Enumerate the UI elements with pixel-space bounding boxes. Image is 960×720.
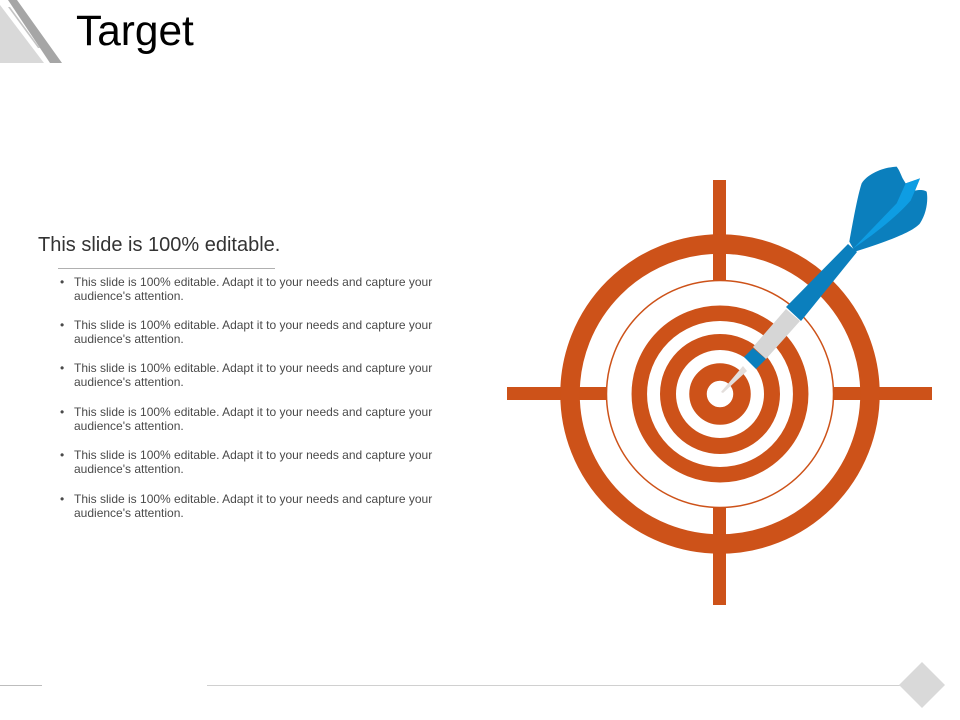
bullet 6: • xyxy=(60,492,64,506)
bullet 1: This slide is 100% editable. Adapt it to your needs and capture your xyxy=(74,275,432,289)
footer diamond xyxy=(899,662,945,708)
bullet 1: audience's attention. xyxy=(74,289,184,303)
bullet 4: This slide is 100% editable. Adapt it to your needs and capture your xyxy=(74,405,432,419)
bullet 2: This slide is 100% editable. Adapt it to your needs and capture your xyxy=(74,318,432,332)
target xyxy=(507,180,932,605)
dart barrel xyxy=(753,309,800,359)
bullet 4: audience's attention. xyxy=(74,419,184,433)
bullet 1: • xyxy=(60,275,64,289)
bullet 3: audience's attention. xyxy=(74,375,184,389)
dart tip collar xyxy=(744,348,766,369)
bullet 5 xyxy=(60,448,432,476)
footer line right xyxy=(207,685,902,686)
bullet list xyxy=(60,275,432,520)
dart flight light xyxy=(853,178,920,248)
bullet 1 xyxy=(60,275,432,303)
bullet 6 xyxy=(60,492,432,520)
subheading: This slide is 100% editable. xyxy=(38,234,280,256)
bullet 2: • xyxy=(60,318,64,332)
heading underline xyxy=(58,268,275,269)
bullet 4 xyxy=(60,405,432,433)
title: Target xyxy=(76,7,194,54)
needle xyxy=(721,366,747,393)
dart shaft xyxy=(786,244,857,321)
bullet 5: This slide is 100% editable. Adapt it to your needs and capture your xyxy=(74,448,432,462)
dart flight dark xyxy=(849,167,927,252)
bullet 5: • xyxy=(60,448,64,462)
bullet 3: This slide is 100% editable. Adapt it to your needs and capture your xyxy=(74,361,432,375)
bullet 4: • xyxy=(60,405,64,419)
dart xyxy=(721,167,927,393)
bullet 3: • xyxy=(60,361,64,375)
corner decoration xyxy=(0,0,62,63)
crosshair xyxy=(507,180,932,605)
bullet 2 xyxy=(60,318,432,346)
bullet 6: audience's attention. xyxy=(74,506,184,520)
bullet 6: This slide is 100% editable. Adapt it to your needs and capture your xyxy=(74,492,432,506)
bullet 5: audience's attention. xyxy=(74,462,184,476)
bullet 2: audience's attention. xyxy=(74,332,184,346)
bullet 3 xyxy=(60,361,432,389)
footer line left xyxy=(0,685,42,686)
